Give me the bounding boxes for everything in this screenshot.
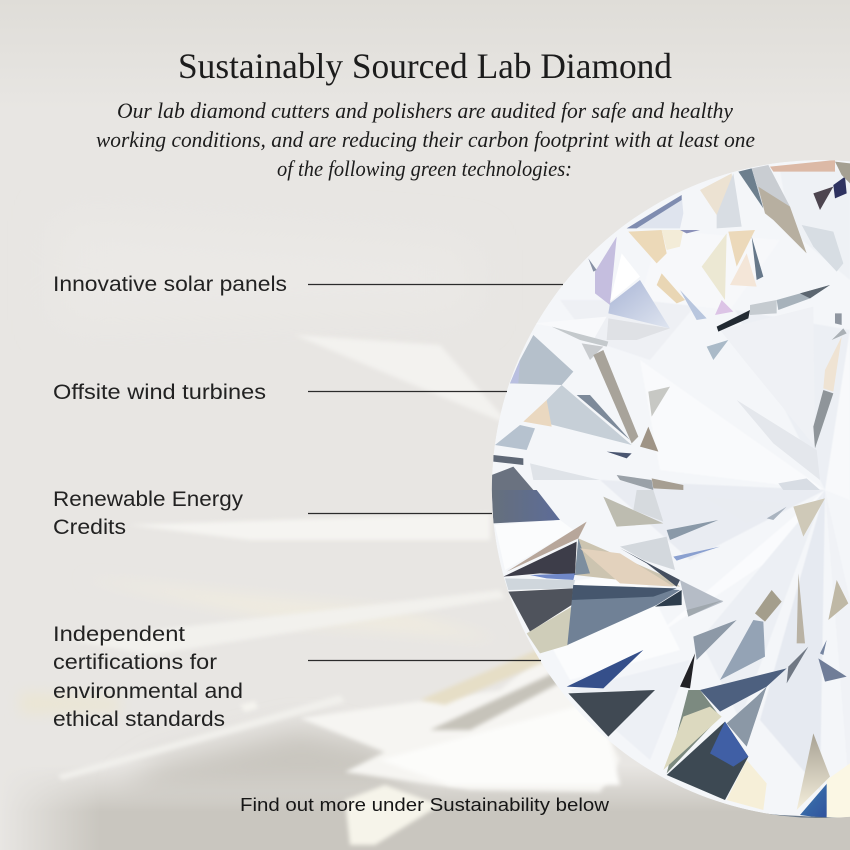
callout: renewable energy credits <box>53 488 492 539</box>
diamond: upper facets <box>492 160 850 490</box>
callout: wind turbines: Offsite wind turbines <box>53 381 266 404</box>
intro paragraph: working conditions, and are reducing their carbon footprint with at least one <box>96 127 755 152</box>
callout: renewable energy credits: Credits <box>53 516 126 539</box>
diamond <box>492 160 850 823</box>
footer note: Find out more under Sustainability below <box>240 795 610 815</box>
diamond: pale radial facets <box>602 480 825 788</box>
intro paragraph <box>96 98 755 181</box>
intro paragraph: of the following green technologies: <box>277 156 572 181</box>
diamond: lower facets <box>492 490 850 823</box>
callout: independent certifications: environmental and <box>53 680 243 703</box>
callout: independent certifications: ethical standards <box>53 708 225 731</box>
callout: independent certifications <box>53 623 541 731</box>
title: Sustainably Sourced Lab Diamond <box>178 46 672 86</box>
intro paragraph: Our lab diamond cutters and polishers are audited for safe and healthy <box>117 98 733 123</box>
callout: independent certifications: Independent <box>53 623 185 646</box>
callout: renewable energy credits: Renewable Energy <box>53 488 244 511</box>
callout: solar panels: Innovative solar panels <box>53 273 287 296</box>
callout: independent certifications: certifications for <box>53 651 217 674</box>
